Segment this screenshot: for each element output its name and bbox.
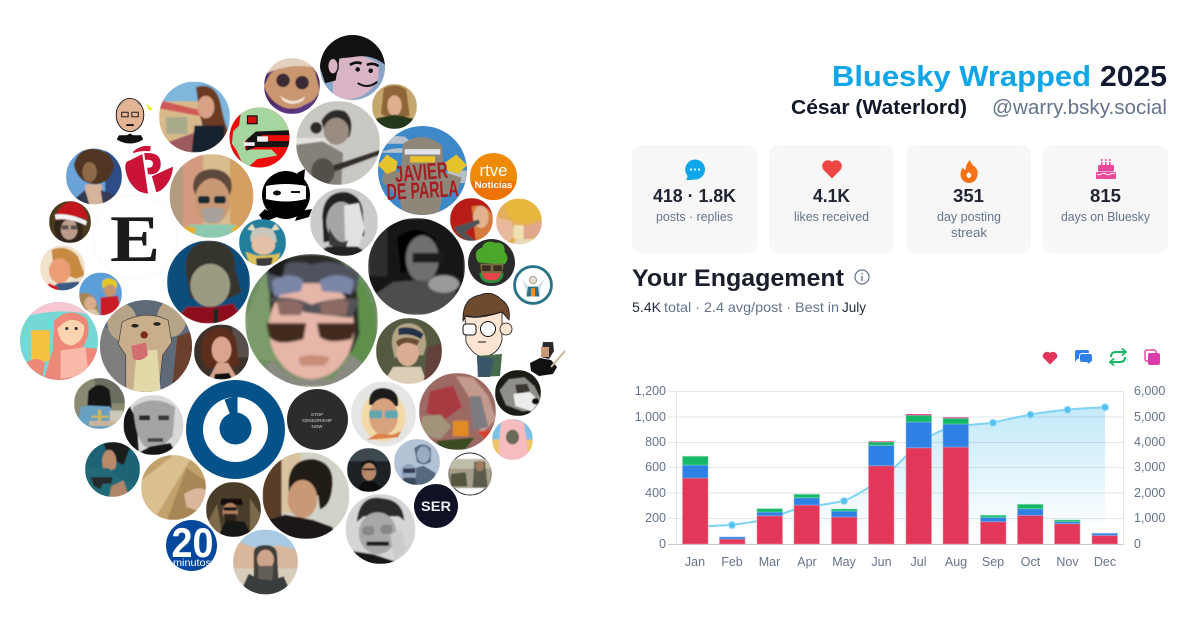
avatar: painted girl [167, 240, 250, 324]
left axis labels: 200 [645, 511, 666, 525]
avatar: blue ring logo [186, 380, 285, 479]
line markers [728, 404, 1108, 528]
label: stop text: CENSORSHIP [302, 418, 332, 423]
stat label: days on Bluesky [1061, 210, 1151, 224]
month labels: Sep [982, 555, 1004, 569]
avatar: bearded guitarist silhouette [530, 342, 565, 376]
avatar: dog-headed person [66, 148, 122, 204]
label: stop text: STOP [311, 412, 323, 417]
stat value: 351 [953, 186, 984, 206]
legend: quotes squares [1145, 350, 1160, 365]
avatar: man in dark shirt [347, 448, 391, 492]
avatar: food platter [419, 373, 496, 450]
avatar: salad and watermelon head [468, 239, 515, 286]
label: Javier: JAVIER [394, 157, 449, 187]
label: minutos: minutos [173, 557, 211, 569]
stacked bars [682, 414, 1118, 544]
avatar: comic man [320, 35, 385, 100]
icon: chat bubble [685, 160, 705, 180]
right axis labels: 4,000 [1134, 435, 1165, 449]
avatar: yellow food with hands [496, 198, 542, 244]
avatar: Javier de Parla mummy [378, 126, 467, 215]
legend: replies bubbles [1075, 350, 1092, 364]
icon: info [855, 270, 869, 284]
stat card: days [1043, 145, 1168, 253]
cumulative area [695, 407, 1105, 544]
month labels: Oct [1021, 555, 1041, 569]
handle: @warry.bsky.social [992, 97, 1167, 119]
label: rtve: rtve [480, 161, 508, 180]
avatar: cartoon old man [114, 98, 146, 144]
avatar: round badge [512, 264, 554, 306]
stat label: posts · replies [656, 210, 733, 224]
avatar: blonde child [40, 246, 85, 290]
left axis labels: 800 [645, 435, 666, 449]
avatar: man with gun in mouth [450, 198, 493, 241]
stat label: likes received [794, 210, 869, 224]
label: Noticias: Noticias [474, 180, 512, 191]
title: 2025 [1100, 61, 1167, 93]
icon: flame [960, 160, 978, 183]
title: Bluesky Wrapped [832, 61, 1091, 93]
label: SER: SER [421, 498, 451, 514]
right axis labels: 1,000 [1134, 511, 1165, 525]
avatar: Jane Austen portrait [376, 318, 442, 384]
month labels: Apr [797, 555, 817, 569]
avatar: illustrated man in mirrored glasses [351, 382, 416, 446]
right axis labels: 0 [1134, 537, 1141, 551]
avatar: E logo [93, 195, 177, 279]
avatar: cartoon mouse [100, 300, 192, 392]
label: de Parla: DE PARLA [386, 175, 459, 205]
avatar: bearded man [233, 530, 298, 594]
left axis labels: 400 [645, 486, 666, 500]
avatar: baby in viking hat [239, 219, 286, 266]
avatar: husky [495, 370, 541, 416]
left axis labels [635, 384, 666, 551]
stat value: 4.1K [813, 186, 850, 206]
avatar: STOP dark circle [287, 389, 348, 450]
avatar: main man with stacked sunglasses [245, 254, 378, 387]
legend: reposts arrows [1110, 348, 1126, 366]
left axis labels: 1,200 [635, 384, 666, 398]
stat label: day posting [937, 210, 1001, 224]
avatar: painted woman with gun [85, 442, 140, 497]
avatar: rtve Noticias [470, 153, 517, 200]
avatar: grey guitarist [296, 101, 380, 185]
right axis labels: 3,000 [1134, 460, 1165, 474]
stat card: likes [769, 145, 894, 253]
stat value: 815 [1090, 186, 1121, 206]
month labels: Feb [721, 555, 743, 569]
avatar: otter with phone [20, 302, 98, 380]
legend: likes heart [1043, 352, 1057, 364]
month labels: Nov [1056, 555, 1079, 569]
left axis labels: 600 [645, 460, 666, 474]
avatar: 20 minutos [166, 520, 217, 571]
avatar: face behind hand [310, 188, 378, 256]
avatar: illustrated couple [394, 439, 440, 485]
label: E letter: E [110, 202, 160, 276]
month labels: May [832, 555, 857, 569]
stat label: streak [951, 226, 988, 240]
avatar: man on river terrace [448, 452, 492, 496]
left axis labels: 0 [659, 537, 666, 551]
icon: heart [822, 160, 842, 178]
month labels: Jan [685, 555, 705, 569]
icon: cake [1096, 159, 1116, 179]
engagement summary: July [842, 299, 866, 315]
stat card: posts and replies [632, 145, 757, 253]
avatar: long-haired man [372, 84, 417, 129]
avatar: blonde hair [141, 455, 206, 520]
avatar: black and white man in glasses [368, 218, 465, 315]
avatar: P logo [125, 146, 173, 194]
month labels: Jul [911, 555, 926, 569]
avatar: pink rabbit suit [492, 419, 533, 460]
right axis labels: 5,000 [1134, 410, 1165, 424]
accent: yellow mark [146, 103, 153, 110]
avatar: bald man with glasses [264, 58, 320, 114]
avatar: man in sunglasses [170, 154, 254, 238]
month labels: Jun [871, 555, 892, 569]
right axis labels [1134, 384, 1165, 551]
month labels: Dec [1094, 555, 1116, 569]
right axis labels: 2,000 [1134, 486, 1165, 500]
label: stop text: NOW [312, 424, 323, 429]
right axis labels: 6,000 [1134, 384, 1165, 398]
label: 20: 20 [172, 519, 214, 566]
month labels: Mar [759, 555, 780, 569]
avatar: hat man with beard [206, 482, 261, 537]
avatar: couple with yellow hat [79, 272, 122, 316]
avatar: Anthony Hopkins [124, 395, 184, 455]
engagement summary: 5.4K [632, 299, 662, 315]
avatar: Groucho Marx [346, 494, 416, 564]
avatar: SER logo [414, 484, 458, 528]
avatar: smiling woman [194, 324, 249, 380]
chart: monthly engagement [635, 384, 1165, 569]
month labels: Aug [945, 555, 967, 569]
avatar: Santa hat woman [49, 201, 91, 243]
left axis labels: 1,000 [635, 410, 666, 424]
stat label [937, 210, 1001, 240]
heading: Your Engagement: Your Engagement [632, 265, 844, 292]
label: stop text [302, 412, 332, 429]
avatar: ninja [259, 169, 312, 222]
engagement summary: total · 2.4 avg/post · Best in [664, 299, 839, 315]
legend icons [1043, 348, 1160, 366]
stat value: 418 · 1.8K [653, 186, 736, 206]
avatar: woman on balcony [159, 82, 230, 152]
avatar: curly-haired woman [262, 452, 350, 539]
avatar: Darth Vader mask [74, 378, 125, 429]
avatar: pixel dinosaur [230, 108, 290, 168]
display name: César (Waterlord) [791, 97, 967, 119]
stat card: streak [906, 145, 1031, 253]
avatar cluster [20, 35, 565, 594]
avatar: cartoon man with glasses [463, 293, 512, 377]
cumulative line [695, 407, 1105, 527]
month labels [685, 555, 1116, 569]
